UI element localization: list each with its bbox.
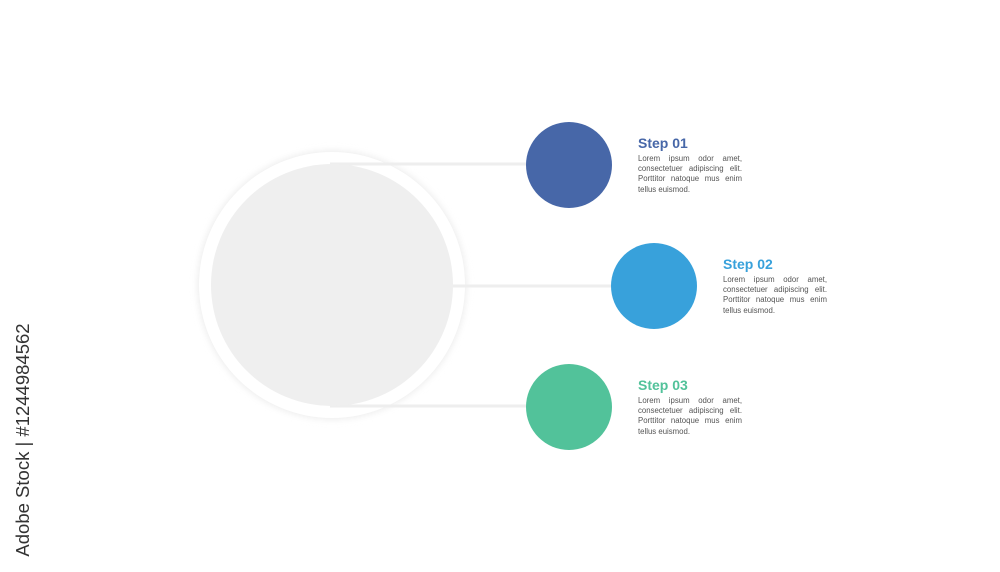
- watermark id: Adobe Stock | #1244984562: [12, 323, 33, 557]
- text step 2: Step 02: [723, 256, 773, 272]
- circle step 3: [526, 364, 612, 450]
- text step 3: Step 03: [638, 377, 688, 393]
- text step 1: Lorem ipsum odor amet, consectetuer adipiscing elit. Porttitor natoque mus enim tellus euismod.: [638, 154, 742, 194]
- main circle outer ring: [199, 152, 465, 418]
- text step 2: Lorem ipsum odor amet, consectetuer adipiscing elit. Porttitor natoque mus enim tellus euismod.: [723, 275, 827, 315]
- main circle inner disc: [211, 164, 453, 406]
- circle step 1: [526, 122, 612, 208]
- text step 3: Lorem ipsum odor amet, consectetuer adipiscing elit. Porttitor natoque mus enim tellus euismod.: [638, 396, 742, 436]
- text step 3: [638, 377, 742, 436]
- text step 1: Step 01: [638, 135, 688, 151]
- connector lines: [330, 164, 615, 406]
- circle step 2: [611, 243, 697, 329]
- text step 1: [638, 135, 742, 194]
- text step 2: [723, 256, 827, 315]
